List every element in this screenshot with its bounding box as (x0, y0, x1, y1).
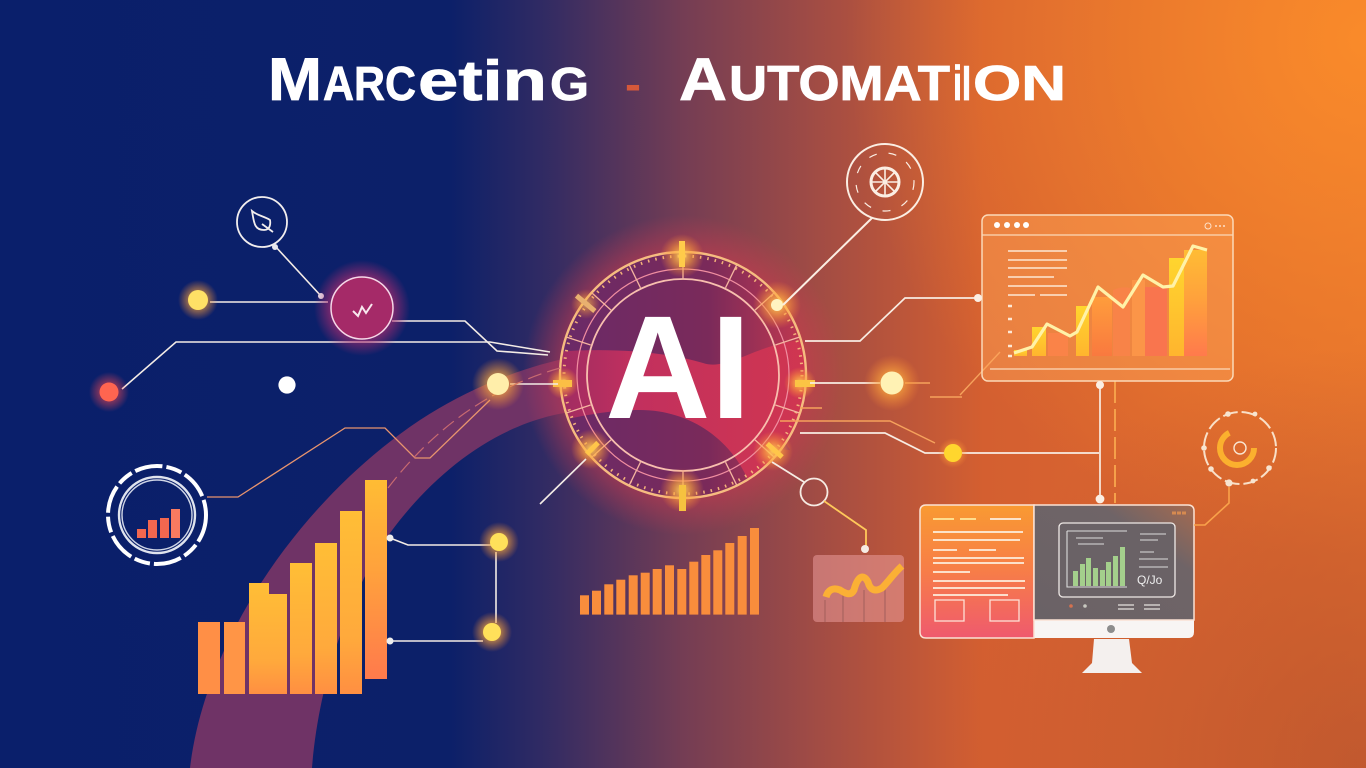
monitor stand (1082, 639, 1142, 673)
connector lines right orange (780, 352, 1000, 443)
title word: Marceting: ARC (323, 58, 416, 111)
bar chart: large (198, 480, 394, 694)
monitor camera (1107, 625, 1115, 633)
window baseline (990, 368, 1230, 370)
icon: top gear badge (783, 144, 923, 305)
node: lower yellow bottom (472, 612, 512, 652)
title word: Automation: iI (953, 57, 971, 111)
title word: Marceting: M (268, 46, 322, 113)
screen footer marks (1069, 513, 1186, 609)
gold marker left (547, 367, 579, 399)
window text lines (1008, 251, 1067, 356)
AI label: AI (605, 286, 751, 450)
ring link circle (772, 462, 869, 553)
connector line from chart icon (207, 400, 490, 497)
desktop monitor (920, 495, 1194, 673)
card glyph: Q/Jo (1137, 573, 1163, 587)
diagonal node lower left (571, 429, 611, 469)
sweeping arc band (190, 351, 790, 768)
diagonal node top right (753, 281, 801, 329)
mini line chart panel (813, 555, 904, 622)
screen left panel (920, 505, 1034, 638)
title dash: - (625, 58, 641, 110)
dashed line on arc (388, 368, 560, 488)
window bars (1014, 250, 1207, 356)
hub disc (559, 251, 807, 499)
node: magenta badge (314, 260, 410, 356)
node: red (89, 372, 129, 412)
diagonal node top left (571, 289, 601, 319)
icon: sync badge (1194, 411, 1276, 525)
node: hub left yellow (472, 358, 524, 410)
gold marker bottom (660, 468, 704, 512)
gold marker right (784, 367, 816, 399)
hub glow (523, 215, 843, 535)
window frame (982, 215, 1233, 381)
title word: Marceting: G (550, 58, 589, 110)
title word: Automation: UTOMAT (729, 57, 950, 111)
left panel text (933, 519, 1025, 595)
title word: Marceting: etin (418, 49, 547, 113)
inner band crossing hub (561, 340, 804, 478)
title (268, 46, 1066, 113)
ring spokes (567, 255, 799, 495)
screen right panel (1034, 505, 1194, 620)
node: right yellow (938, 438, 968, 468)
inner ring (587, 279, 779, 471)
node: right yellow white (864, 355, 920, 411)
window trend line (1014, 246, 1207, 353)
title word: Automation: A (679, 46, 727, 113)
middle ring (577, 269, 789, 481)
tick ring (564, 256, 802, 494)
node: white (278, 376, 296, 394)
node: yellow left (178, 280, 218, 320)
diagonal node lower right (753, 431, 793, 471)
inner chart card (1059, 523, 1175, 597)
left panel boxes (935, 600, 1019, 621)
title word: Automation: ON (973, 57, 1066, 111)
icon: leaf badge (237, 197, 324, 299)
dashed vertical link (1114, 381, 1116, 503)
green bars (1073, 547, 1125, 586)
central AI hub (523, 215, 843, 535)
card lines (1067, 531, 1168, 587)
outer ring (560, 252, 806, 498)
connector lines right (800, 298, 1100, 503)
monitor chin (1034, 620, 1194, 638)
window header (982, 222, 1233, 235)
icon: circular chart badge (108, 466, 206, 564)
gold marker top (660, 234, 704, 278)
node: lower yellow top (479, 522, 519, 562)
bar chart: center (580, 528, 759, 615)
dashboard window (974, 215, 1233, 389)
connector lines left (122, 246, 586, 641)
